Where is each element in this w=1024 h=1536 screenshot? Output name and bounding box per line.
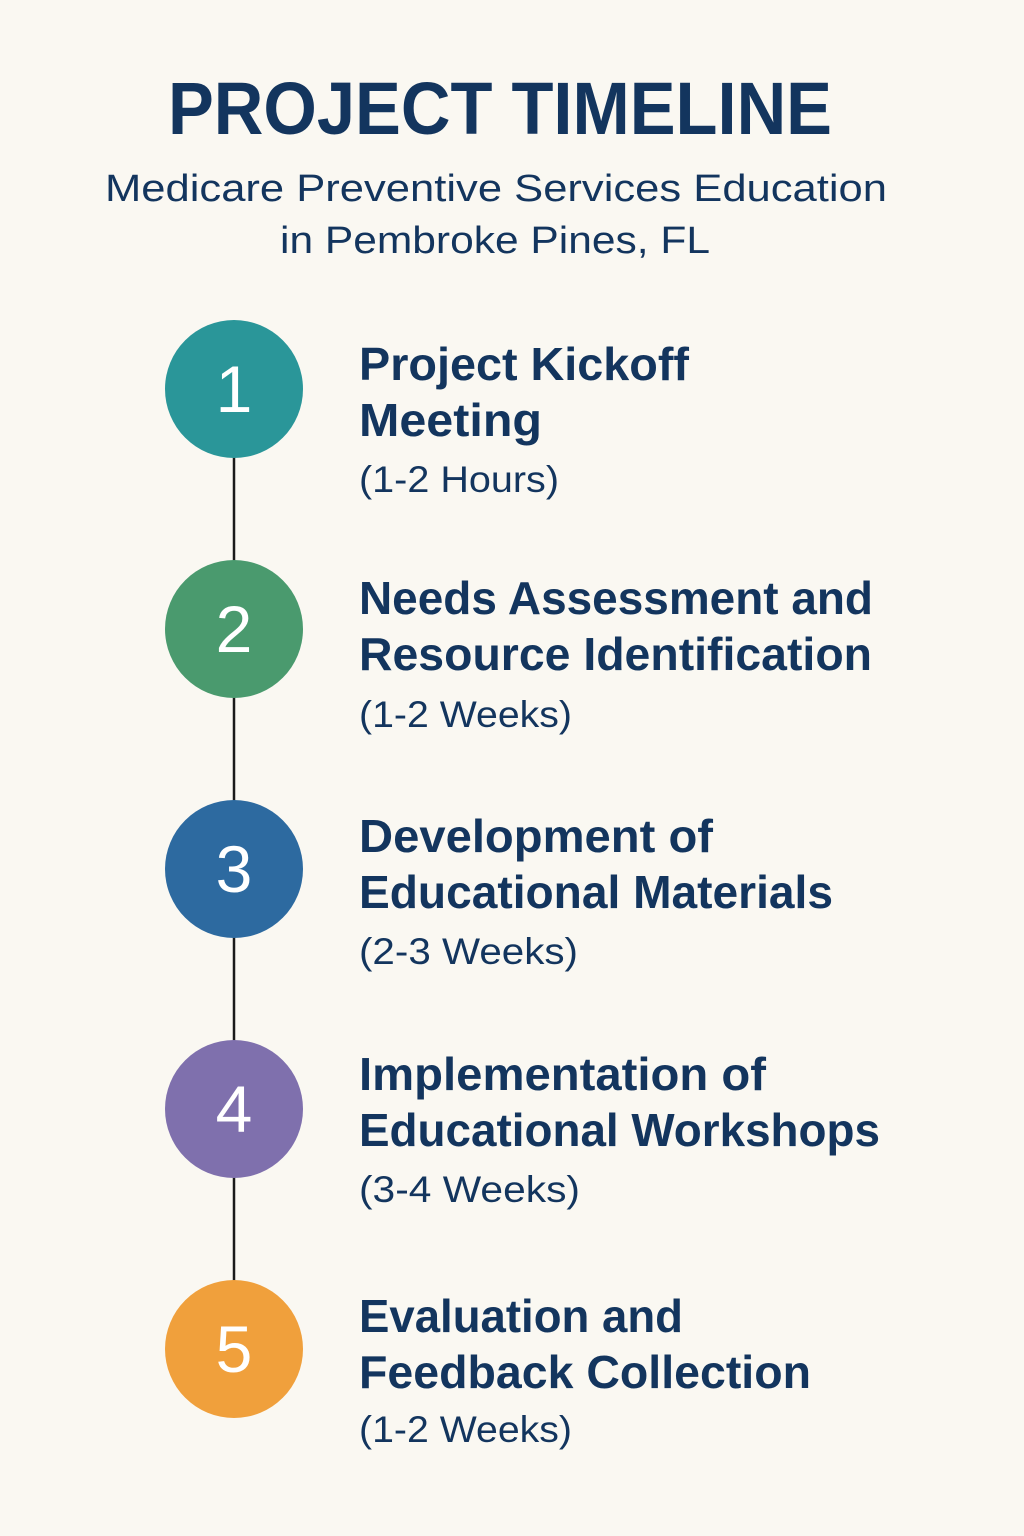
text: step 2 — [359, 572, 873, 735]
text: step 3: (2-3 Weeks) — [359, 931, 578, 972]
icon: circle 2 — [165, 560, 303, 698]
step 3 — [165, 800, 833, 972]
subtitle: Medicare Preventive Services Education — [105, 168, 887, 210]
text: step 4: (3-4 Weeks) — [359, 1169, 580, 1210]
icon: circle 2: 2 — [216, 592, 252, 666]
icon: circle 1: 1 — [216, 352, 252, 426]
icon: circle 5: 5 — [216, 1312, 252, 1386]
text: step 1: Meeting — [359, 394, 542, 446]
text: step 2: Needs Assessment and — [359, 572, 873, 624]
text: step 5 — [359, 1290, 811, 1450]
title: PROJECT TIMELINE — [168, 67, 832, 150]
step 4 — [165, 1040, 880, 1210]
text: step 4 — [359, 1048, 880, 1210]
icon: circle 4: 4 — [216, 1072, 252, 1146]
subtitle: in Pembroke Pines, FL — [280, 220, 710, 262]
step 2 — [165, 560, 873, 735]
text: step 5: Feedback Collection — [359, 1346, 811, 1398]
icon: circle 3 — [165, 800, 303, 938]
text: step 1: (1-2 Hours) — [359, 459, 559, 500]
text: step 5: Evaluation and — [359, 1290, 683, 1342]
icon: circle 4 — [165, 1040, 303, 1178]
icon: circle 3: 3 — [216, 832, 252, 906]
text: step 3: Development of — [359, 810, 714, 862]
timeline connector line — [233, 455, 235, 1285]
text: step 3: Educational Materials — [359, 866, 833, 918]
text: step 4: Implementation of — [359, 1048, 767, 1100]
text: step 3 — [359, 810, 833, 972]
icon: circle 5 — [165, 1280, 303, 1418]
text: step 1: Project Kickoff — [359, 338, 690, 390]
step 1 — [165, 320, 690, 500]
subtitle — [105, 168, 887, 262]
text: step 5: (1-2 Weeks) — [359, 1409, 572, 1450]
text: step 2: Resource Identification — [359, 628, 872, 680]
icon: circle 1 — [165, 320, 303, 458]
text: step 2: (1-2 Weeks) — [359, 694, 572, 735]
text: step 1 — [359, 338, 690, 500]
step 5 — [165, 1280, 811, 1450]
text: step 4: Educational Workshops — [359, 1104, 880, 1156]
